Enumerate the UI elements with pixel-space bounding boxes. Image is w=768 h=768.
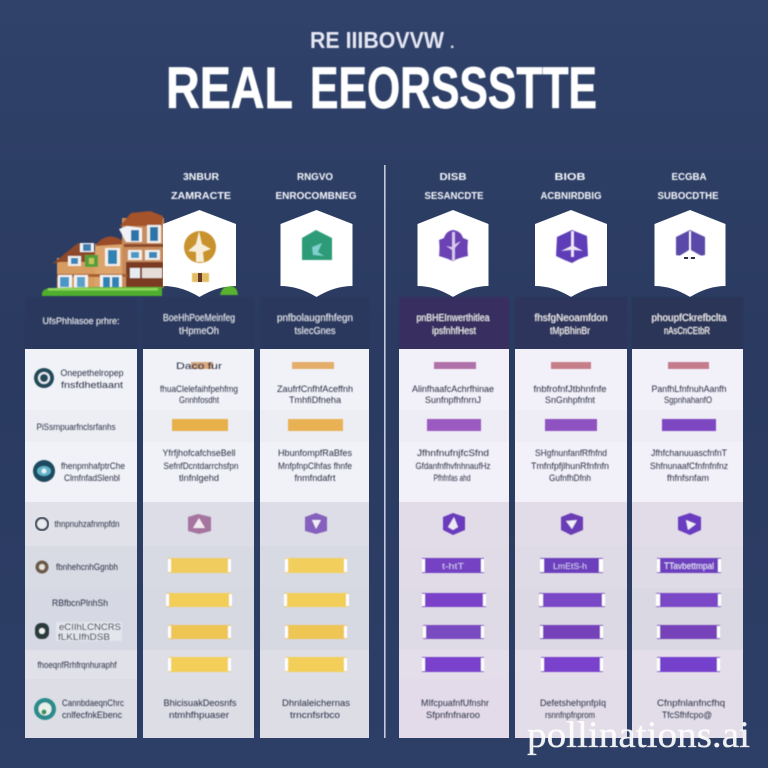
label: row 2: PiSsrnpuarfnclsrfanhs [36,422,116,432]
panel: column 4 [515,349,627,738]
text: row 3: fhfnfsnfam [667,473,709,483]
column heading 2: ENROCOMBNEG [276,191,357,202]
title: EEORSSSTTE [310,56,597,121]
bar: row 6a [656,593,721,607]
icon: row 4 [678,513,701,535]
column heading 5: SUBOCDTHE [658,191,719,202]
label: row 6: fLKLIfhDSB [58,632,110,642]
text: row 3 [278,448,352,483]
bar: row 5 [168,558,231,573]
text: row 3: SHgfnunfanfRfhfnd [535,448,607,458]
subtitle: RE IIIBOVVW [310,27,444,53]
text: row 1: fnbfrofnfJtbhnfnfe [534,384,606,394]
subtitle: . [450,35,454,52]
bar: row 6a [284,593,349,607]
bar: row 7 [422,657,484,672]
icon: row 3 [33,460,55,482]
label: row 7: fhoeqnfRrhfrqnhuraphf [38,660,117,670]
bar: row 2 [545,419,597,431]
column heading 2: RNGVO [297,172,333,183]
text: row 8: rsnnfnpfnprom [545,710,595,720]
icon: row 4 [443,513,465,535]
header row label: UfsPhhlasoe prhre: [42,316,120,326]
text: row 1 [160,361,238,405]
bar: row 2 [427,419,481,431]
text: row 3: MnfpfnpClhfas fhnfe [278,461,352,471]
text: row 3: SefnfDcntdarrchsfpn [164,461,238,471]
header cell 1 [143,297,254,349]
text: row 1: ZaufrfCnfhfAceffnh [277,384,353,394]
bar: row 5: LmEtS-h [553,562,587,571]
price bar [191,362,213,369]
panel: column 5 [632,349,743,738]
bar: row 2 [172,419,228,431]
text: row 3: TmfnfpfjlhunRfnfnfn [531,461,609,471]
column heading 4 [540,172,602,202]
text: row 3: JfhnfnufnjfcSfnd [417,448,489,458]
text: row 8 [657,698,725,720]
hexagon badge 2 with green icon [280,210,352,297]
header cell 5 [632,297,743,349]
text: row 1: Daco fur [176,361,222,371]
price bar [551,362,591,369]
icon: row 8 [34,698,56,720]
column heading 5: ECGBA [672,172,706,183]
bar: row 5: t-htT [442,562,464,571]
label: row 3: fhenpmhafptrChe [61,461,125,471]
text: row 8: trncnfsrbco [290,710,340,720]
text: row 3: Pfhfnfas ahd [434,473,470,483]
text: row 1 [412,384,494,405]
watermark: pollinations.ai [527,715,750,756]
header cell 3: ipsfnhfHest [432,326,476,337]
icon: row 4 [36,518,48,530]
illustration: houses on grass [42,211,238,296]
icon: row 4 [561,513,583,535]
header cell 4: tMpBhinBr [550,326,591,337]
text: row 8: TfcSfhfcpo@ [662,710,712,720]
icon: row 4 [305,513,327,534]
text: row 3: GfdanfnfhvfnhnaufHz [416,461,491,471]
header cell 2: tslecGnes [294,326,336,337]
column heading 3 [424,172,484,202]
bar: row 6a [539,593,605,607]
bar: row 6b [540,625,603,639]
label: row 6 [56,622,122,642]
text: row 1: fhuaClelefaihfpehfmg [160,384,238,394]
bar: row 7 [657,657,720,672]
text: row 3: fnmfndafrt [294,473,336,483]
icon: row 1 [34,368,54,388]
text: row 3: GufnfhDfnh [549,473,591,483]
text: row 3: tlnfnlgehd [179,473,219,483]
bar: row 2 [662,419,716,431]
text: row 3 [416,448,491,483]
vertical divider [384,165,386,738]
price bar [668,362,709,369]
label: row 8: CannbdaeqnChrc [62,698,124,708]
column heading 3: DISB [440,172,466,183]
header cell 2: pnfbolaugnfhfegn [277,313,353,324]
hexagon badge 1 with gold icon [163,210,236,297]
bar: row 2 [288,419,343,431]
text: row 8: Cfnpfnlanfncfhq [657,698,725,708]
price bar [292,362,334,369]
title [166,56,597,121]
header cell 5: nAsCnCEtbR [664,326,710,337]
text: row 8 [421,698,489,720]
column heading 4: ACBNIRDBIG [540,191,602,202]
column heading 4: BIOB [554,172,586,183]
panel: column 1 [143,349,254,738]
icon: row 6 [35,623,49,639]
text: row 3 [531,448,609,483]
bar: row 5 [540,558,603,573]
column heading 2 [276,172,357,202]
header cell 1: BoeHhPoeMeinfeg [163,313,235,324]
text: row 1 [652,384,726,405]
bar: row 6a [422,593,486,607]
price bar [434,362,476,369]
text: row 1: SgpnhahanfO [664,395,712,405]
label: row 1 [60,368,124,390]
label: row 5: fbnhehcnhGgnbh [56,562,118,572]
text: row 8 [282,698,351,720]
column heading 1: 3NBUR [183,172,220,183]
label: row 3 [61,461,125,483]
text: row 8 [540,698,606,720]
label: row 1: fnsfdhetlaant [61,380,124,390]
header row label [25,297,137,349]
column heading 5 [658,172,719,202]
text: row 1 [277,384,353,405]
label: row 4: thnpnuhzafnmpfdn [54,519,120,529]
icon: row 4 [188,514,211,534]
label: row 6 top: RBfbcnPlnhSh [52,598,108,608]
text: row 8: Sfpnfnfnaroo [426,710,480,720]
header cell 2 [260,297,369,349]
text: row 1: SnGnhpfnfnt [545,395,595,405]
text: row 3: YfrfjhofcafchseBell [162,448,236,458]
column heading 1: ZAMRACTE [171,191,231,202]
text: row 1: TmhfiDfneha [289,395,341,405]
bar: row 6b [423,625,484,639]
header cell 1: tHpmeOh [179,326,219,337]
text: row 8: BhicisuakDeosnfs [164,698,237,708]
bar: row 7 [168,657,231,672]
bar: row 7 [285,657,347,672]
header cell 3 [399,297,509,349]
label: row 8 [62,698,124,720]
header cell 5: phoupfCkrefbclta [652,313,727,324]
text: row 8: DefetshehpnfpIq [540,698,606,708]
bar: row 5 [422,558,484,573]
bar: row 7 [541,657,603,672]
label: row 1: Onepethelropep [60,368,124,378]
bar: row 6b [168,625,231,639]
text: row 8: ntmhfhpuaser [169,710,229,720]
title: REAL [166,56,293,121]
text: row 1: AlinfhaafcAchrfhinae [412,384,494,394]
text: row 1: Gnnhfosdht [179,395,219,405]
panel: row labels [25,349,137,738]
text: row 3: HbunfompfRaBfes [278,448,352,458]
text: row 3: JfhfchanuuascfnfnT [651,448,727,458]
text: row 1 [534,384,606,405]
text: row 8 [164,698,237,720]
header cell 4 [515,297,627,349]
hexagon badge 4 with purple icon [535,210,607,297]
icon: row 5 [36,560,48,574]
text: row 3: ShfnunaafCfnfnfnfnz [650,461,728,471]
bar: row 6a [166,593,232,607]
label: row 6: eCIIhLCNCRS [59,622,121,632]
bar: row 5 [657,558,721,573]
bar: row 5: TTavbettmpal [664,561,714,571]
text: row 8: MIfcpuafnfUfnshr [421,698,489,708]
text: row 3 [650,448,728,483]
bar: row 6b [285,625,347,639]
panel: column 3 [399,349,509,738]
column heading 1 [171,172,231,202]
hexagon badge 3 with purple icon [418,210,488,297]
column heading 3: SESANCDTE [424,191,484,202]
text: row 1: PanfhLfnfnuhAanfh [652,384,726,394]
text: row 3 [162,448,238,483]
header cell 4: fhsfgNeoamfdon [534,313,608,324]
label: row 3: ClmfnfadSlenbl [64,473,120,483]
text: row 8: Dhnlaleichernas [282,698,351,708]
text: row 1: SunfnpfhfnrnJ [425,395,481,405]
label: row 8: cnlfecfnkEbenc [62,710,122,720]
bar: row 5 [285,558,347,573]
panel: column 2 [260,349,369,738]
bar: row 6b [657,625,720,639]
header cell 3: pnBHEInwerthitlea [416,313,490,324]
hexagon badge 5 with purple icon [654,210,726,297]
